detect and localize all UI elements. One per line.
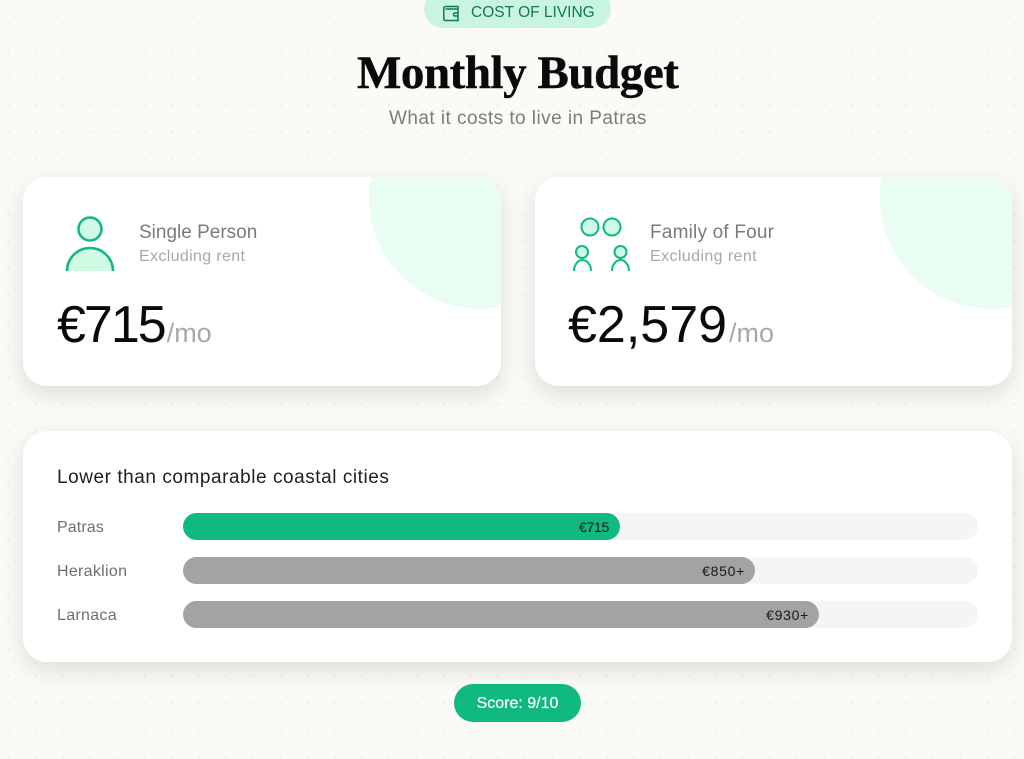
price: 2,579 per month: €2,579/mo bbox=[568, 296, 774, 354]
row: Larnaca bbox=[57, 601, 978, 628]
title: Monthly Budget bbox=[357, 47, 678, 99]
label: single person: Single Person bbox=[139, 222, 257, 243]
note: excluding rent: Excluding rent bbox=[139, 248, 245, 265]
city label: Heraklion bbox=[57, 563, 127, 580]
row: Patras bbox=[57, 513, 978, 540]
bar track: €715 bbox=[579, 519, 609, 535]
panel: single person bbox=[23, 177, 501, 386]
bar track bbox=[183, 557, 978, 584]
icon: wallet bbox=[443, 6, 459, 22]
bar track: €850+ bbox=[702, 563, 745, 579]
decorative quarter circle bbox=[880, 85, 1024, 309]
badge: cost of living bbox=[424, 0, 611, 28]
subtitle: What it costs to live in Patras bbox=[389, 108, 647, 129]
bar track bbox=[183, 601, 978, 628]
city label: Patras bbox=[57, 519, 104, 536]
city label: Larnaca bbox=[57, 607, 117, 624]
panel: family of four bbox=[535, 177, 1012, 386]
score badge bbox=[454, 684, 581, 722]
icon: person bbox=[66, 216, 114, 271]
label: family of four: Family of Four bbox=[650, 222, 774, 243]
decorative quarter circle bbox=[369, 85, 593, 309]
comparison heading: Lower than comparable coastal cities bbox=[57, 467, 389, 488]
badge label: COST OF LIVING bbox=[471, 4, 595, 21]
panel: comparison bbox=[23, 431, 1012, 662]
price: 715 per month: €715/mo bbox=[57, 296, 212, 354]
note: excluding rent: Excluding rent bbox=[650, 248, 757, 265]
row: Heraklion bbox=[57, 557, 978, 584]
icon: family bbox=[573, 218, 630, 271]
bar track: €930+ bbox=[766, 607, 809, 623]
bar track bbox=[183, 513, 978, 540]
score badge: Score: 9/10 bbox=[477, 695, 558, 712]
